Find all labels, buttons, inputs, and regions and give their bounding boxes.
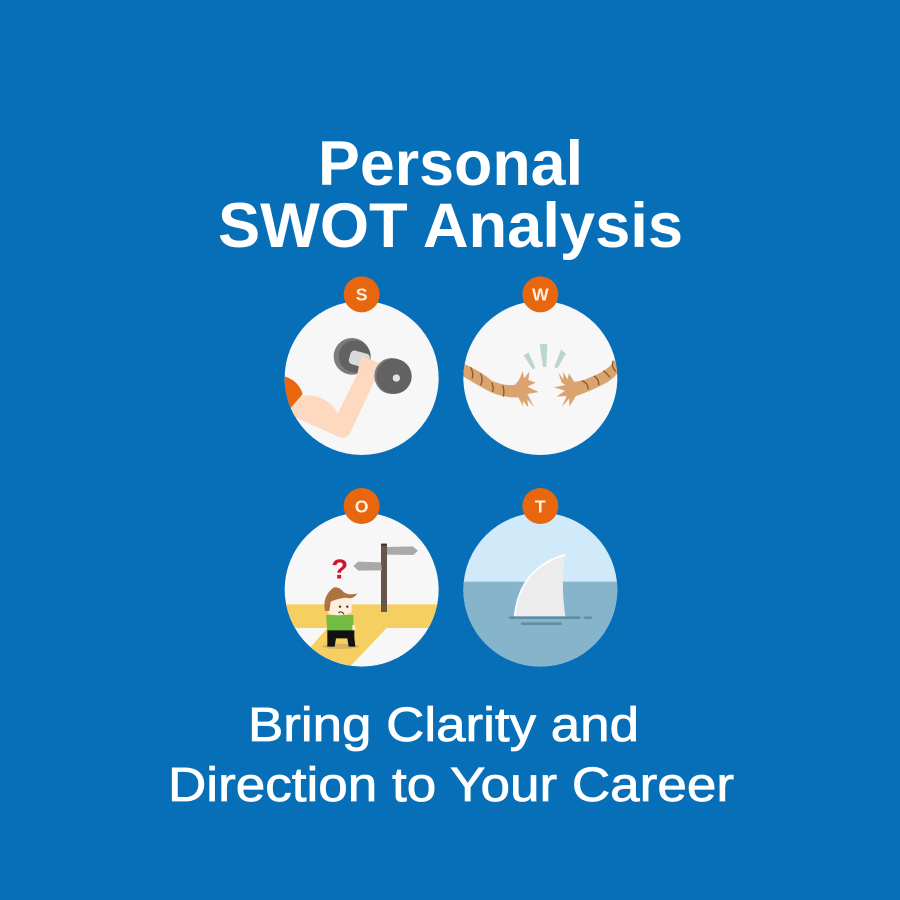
badge: O (344, 488, 380, 524)
badge: O: O (355, 496, 369, 516)
icon: signpost (353, 544, 418, 612)
icon: question mark: ? (331, 554, 348, 585)
subtitle (168, 699, 734, 812)
panel: weaknesses (462, 276, 618, 455)
title: SWOT Analysis (218, 191, 683, 261)
panel: strengths (280, 276, 439, 455)
title (218, 129, 683, 261)
icon: fraying rope (462, 357, 618, 407)
icon: snap lines (524, 344, 566, 369)
badge: S (344, 276, 380, 312)
badge: W (522, 276, 558, 312)
icon: sea (463, 582, 618, 667)
icon: water ripples (509, 616, 592, 625)
title: Personal (318, 129, 583, 199)
subtitle: Direction to Your Career (168, 759, 734, 812)
icon: flexed arm with dumbbell (280, 338, 412, 438)
icon: puzzled man (322, 587, 359, 649)
badge: T (522, 488, 558, 524)
icon: shark fin (515, 555, 565, 616)
badge: W: W (532, 284, 549, 304)
badge: T: T (535, 496, 546, 516)
badge: S: S (356, 285, 368, 305)
icon: crossroads (280, 604, 443, 667)
panel: opportunities (280, 488, 443, 667)
subtitle: Bring Clarity and (248, 699, 639, 752)
panel: threats (460, 488, 623, 672)
